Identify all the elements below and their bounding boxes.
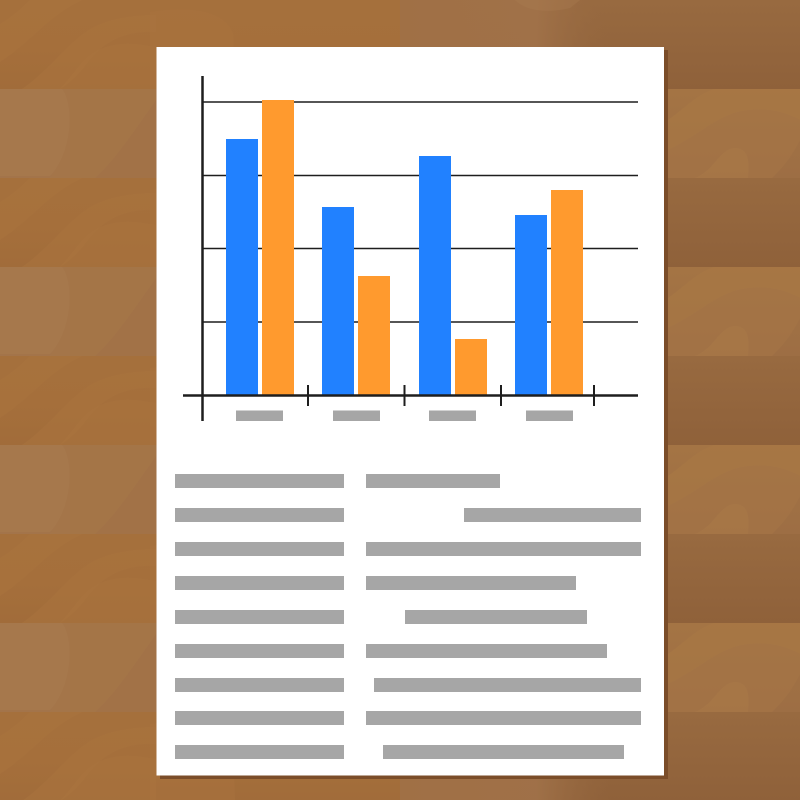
grid lines — [202, 102, 638, 322]
page shadow — [160, 50, 668, 779]
axes — [183, 76, 638, 421]
left text column placeholder — [175, 474, 344, 759]
right text column placeholder — [366, 474, 641, 759]
bar chart — [183, 76, 638, 421]
group 2 bars — [322, 207, 390, 395]
group 3 bars — [419, 156, 487, 395]
group 4 bars — [515, 190, 583, 395]
document page — [156, 47, 664, 776]
group 1 bars — [226, 100, 294, 395]
axis label placeholders — [236, 410, 573, 421]
